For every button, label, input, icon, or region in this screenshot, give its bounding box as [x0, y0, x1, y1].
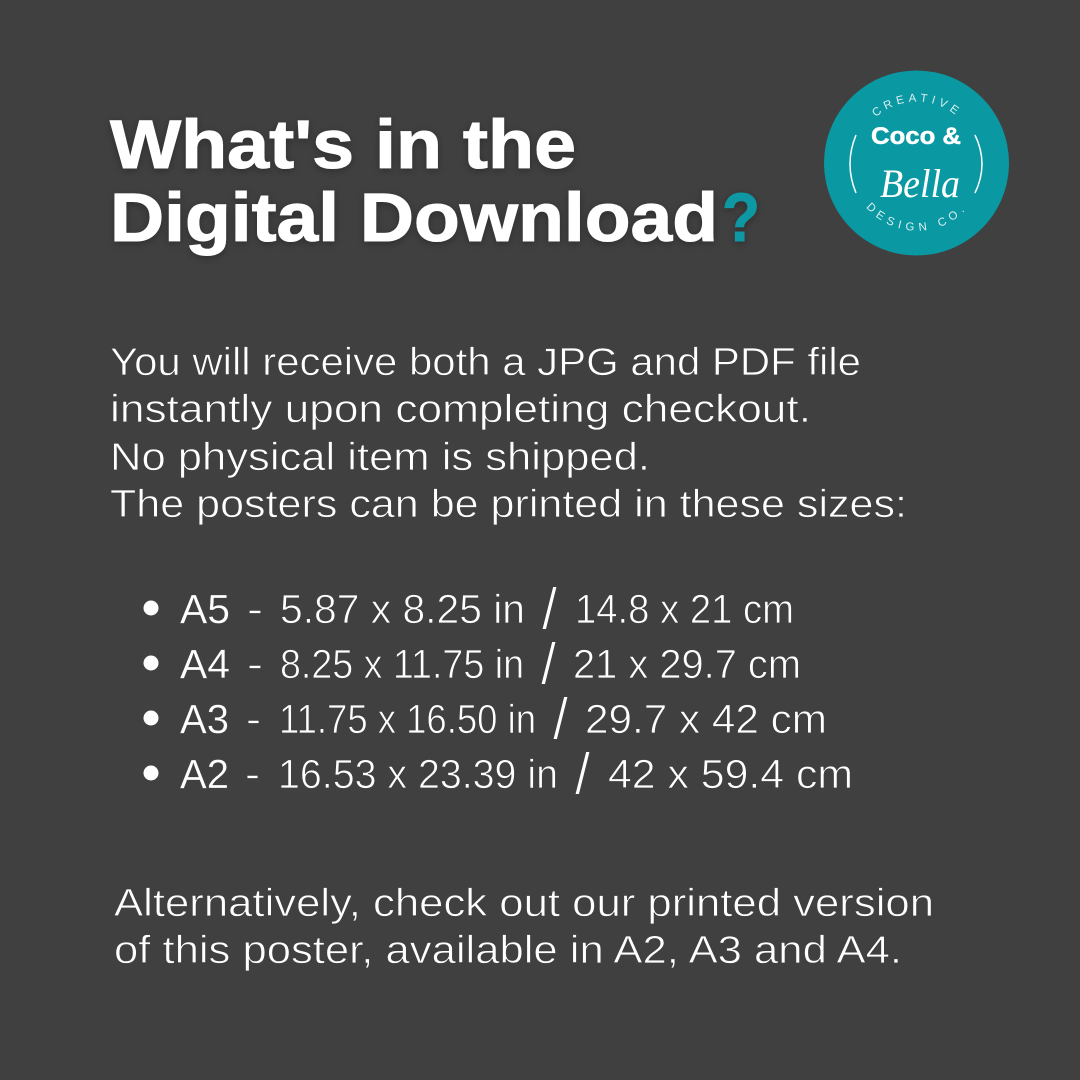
size A4: 8.25 x 11.75 in: [280, 641, 524, 687]
size A4: [144, 632, 801, 697]
closing note: of this poster, available in A2, A3 and A4.: [114, 929, 902, 972]
size A4: -: [247, 641, 263, 687]
size A3: A3: [180, 696, 229, 742]
logo badge: Bella: [880, 161, 960, 206]
intro paragraph: No physical item is shipped.: [110, 436, 650, 479]
size A2: /: [575, 742, 591, 807]
title: What's in the: [110, 106, 576, 183]
title: ?: [722, 179, 760, 256]
closing note: Alternatively, check out our printed version: [114, 882, 934, 925]
size A3: 11.75 x 16.50 in: [279, 696, 536, 742]
logo badge: DESIGN CO.: [866, 202, 964, 231]
closing note: [114, 882, 934, 972]
title: Digital Download: [110, 179, 718, 256]
size A2: 16.53 x 23.39 in: [278, 751, 558, 797]
size A2: [144, 742, 853, 807]
size A2: A2: [180, 751, 229, 797]
size A3: /: [553, 687, 569, 752]
intro paragraph: instantly upon completing checkout.: [110, 388, 811, 431]
intro paragraph: [110, 341, 907, 526]
size A4: /: [541, 632, 557, 697]
size list: [144, 577, 853, 807]
size A5: 14.8 x 21 cm: [575, 586, 794, 632]
size A2: 42 x 59.4 cm: [608, 751, 853, 797]
logo badge: Coco &: [871, 123, 961, 150]
size A2: -: [245, 751, 260, 797]
intro paragraph: The posters can be printed in these sizes:: [110, 483, 907, 526]
size A3: -: [246, 696, 261, 742]
size A5: [144, 577, 794, 642]
size A5: A5: [180, 586, 230, 632]
title: [110, 106, 760, 256]
intro paragraph: You will receive both a JPG and PDF file: [110, 341, 861, 384]
size A4: A4: [180, 641, 230, 687]
size A4: 21 x 29.7 cm: [573, 641, 801, 687]
logo badge: [824, 70, 1009, 256]
size A5: /: [542, 577, 558, 642]
size A3: 29.7 x 42 cm: [585, 696, 827, 742]
logo badge: CREATIVE: [872, 94, 960, 116]
size A5: -: [247, 586, 263, 632]
size A5: 5.87 x 8.25 in: [280, 586, 525, 632]
size A3: [144, 687, 827, 752]
